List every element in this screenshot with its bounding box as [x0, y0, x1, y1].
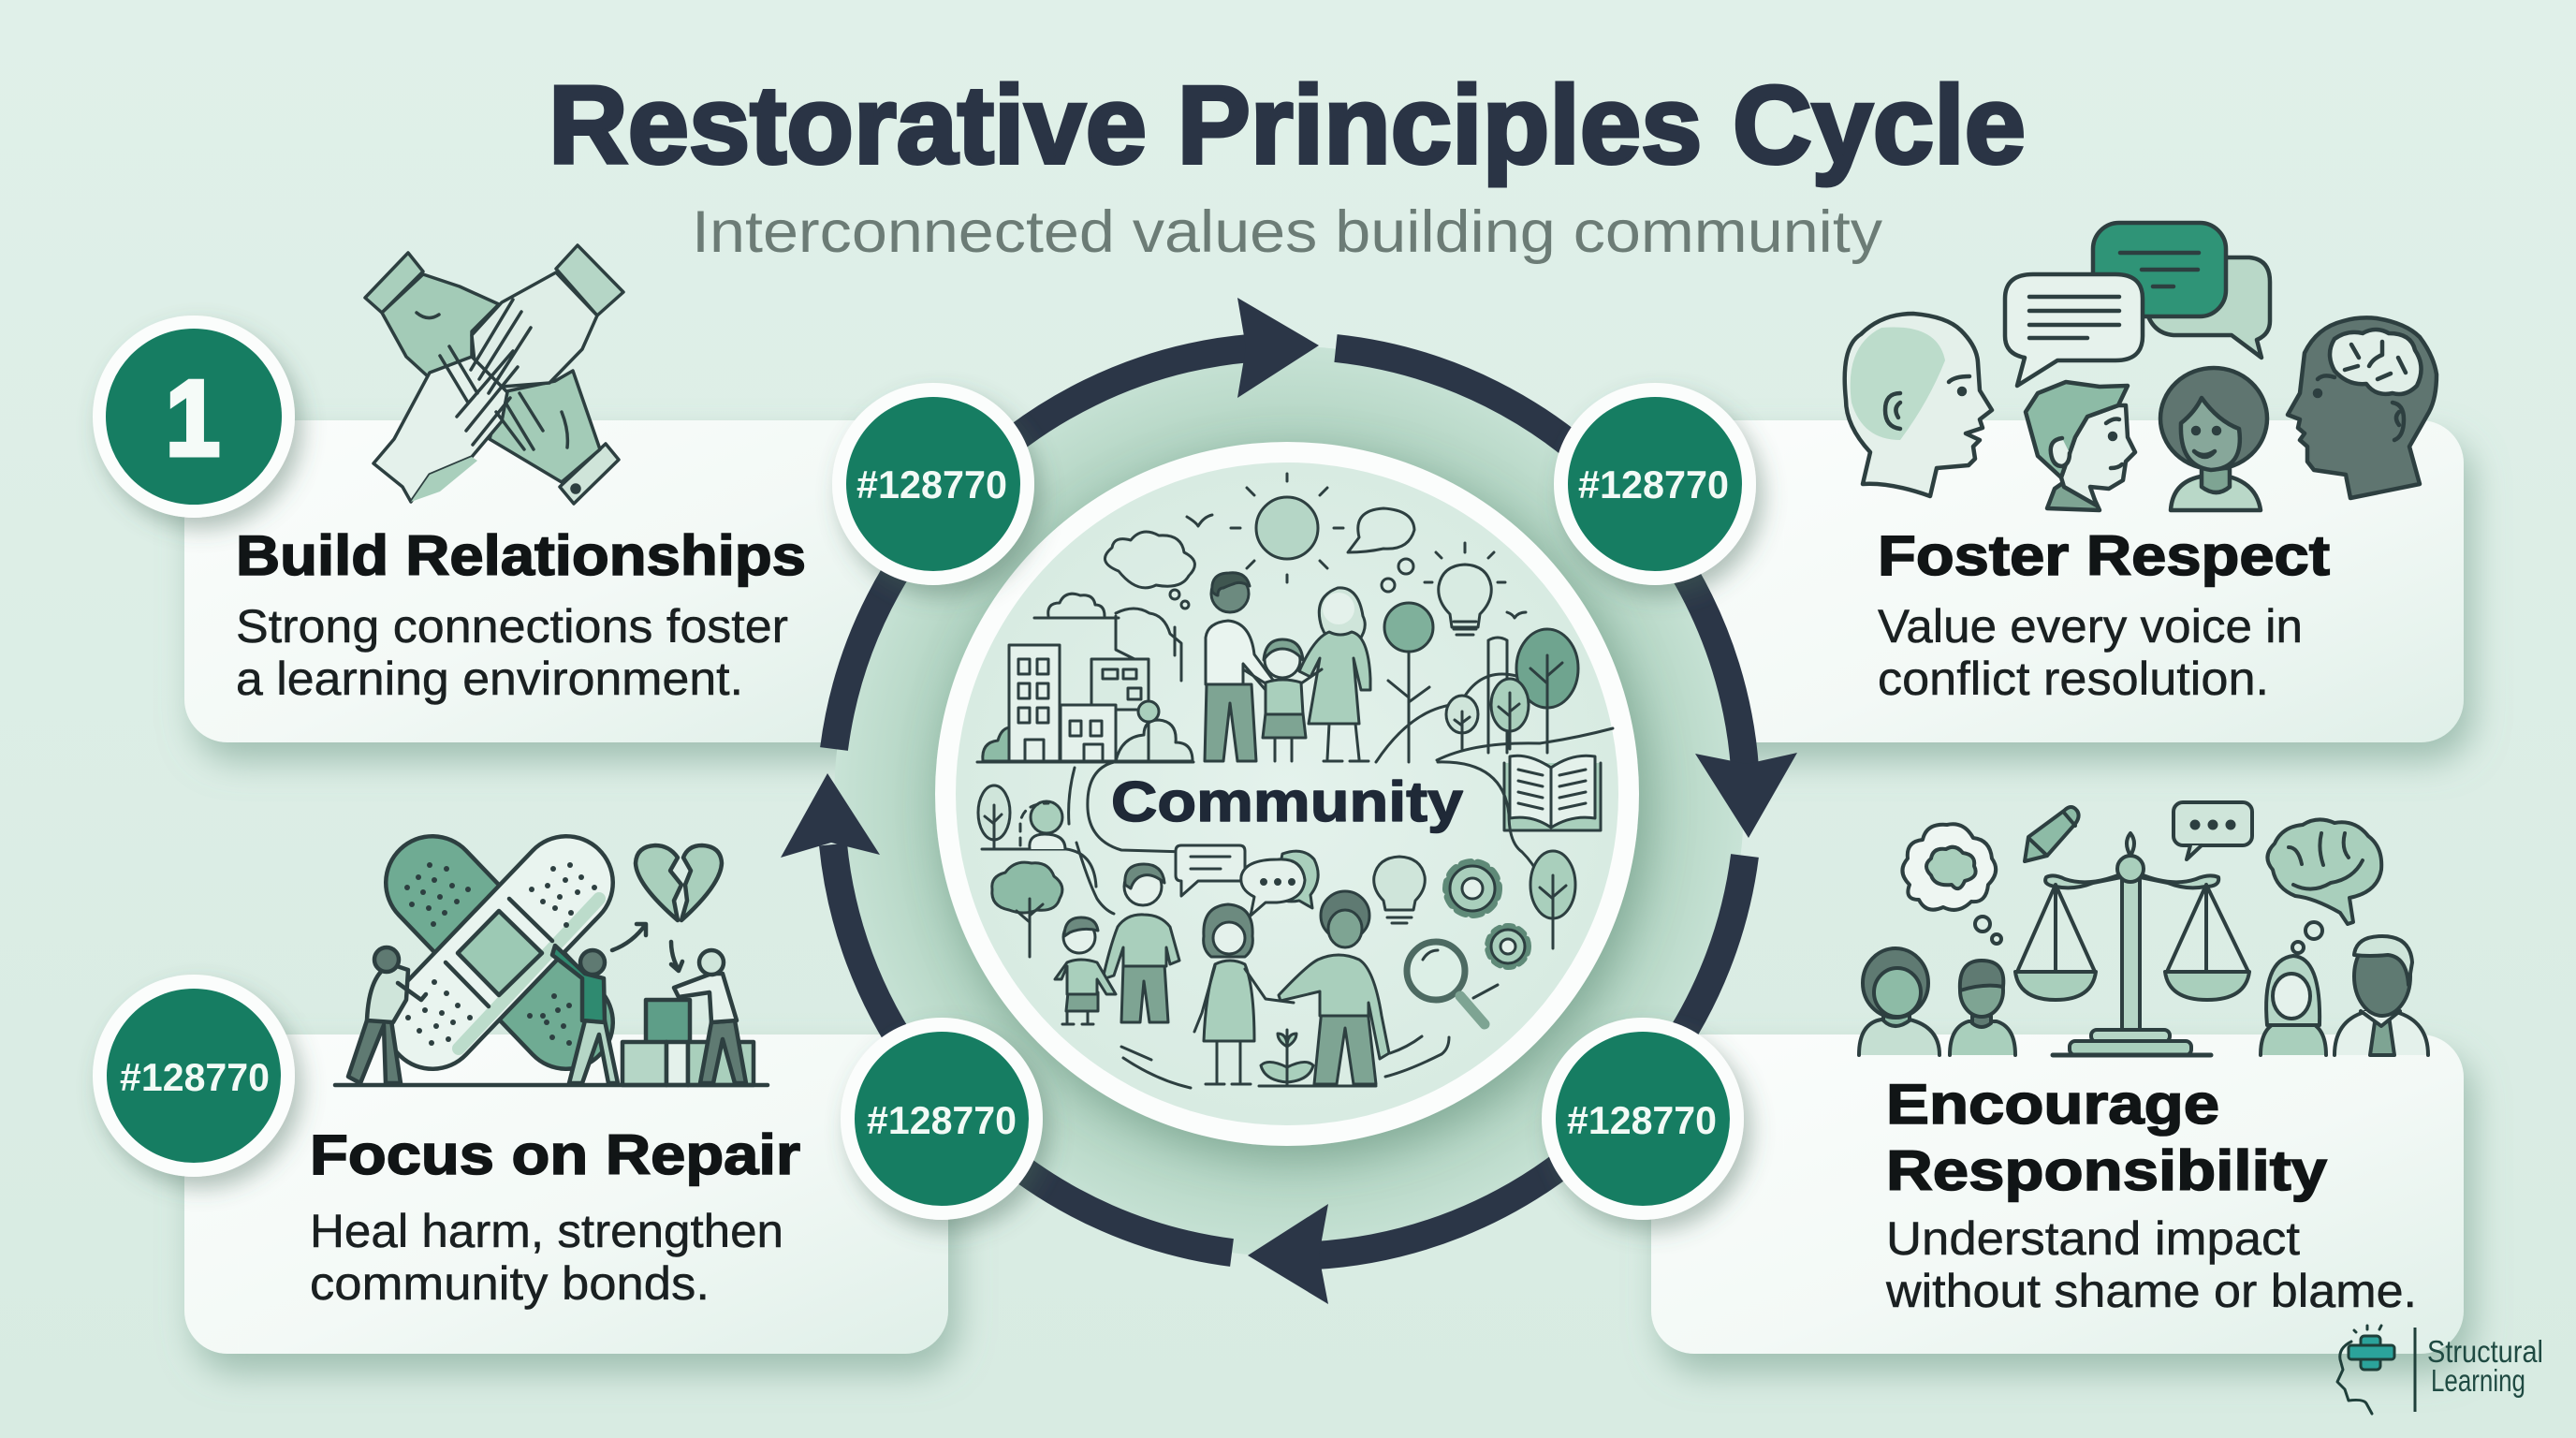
text: focus on repair description line two: community bonds. [310, 1257, 710, 1310]
blocks [622, 1000, 754, 1085]
badge: top left [832, 383, 1034, 585]
badge: focus on repair [93, 975, 295, 1177]
text: foster respect description line two: conflict resolution. [1878, 653, 2269, 705]
figure: family child [1243, 639, 1322, 761]
icon: birds [1187, 515, 1526, 618]
thought cloud [1902, 824, 2001, 944]
icon: cloud [1105, 532, 1194, 588]
text: encourage responsibility description line two: without shame or blame. [1885, 1265, 2417, 1317]
bandage strip green [432, 883, 566, 1022]
logo icon [2337, 1326, 2394, 1414]
figure: girl [1194, 904, 1294, 1084]
badge: bottom ring left [841, 1018, 1043, 1220]
central community circle [935, 442, 1639, 1146]
icon: crossed bandage repair scene [335, 845, 768, 1085]
icon: four joined hands [365, 245, 623, 504]
icon: small gear [1488, 927, 1528, 966]
person two [1950, 961, 2015, 1055]
panel: foster respect card [1685, 420, 2464, 742]
text: foster respect description: Value every voice in [1878, 600, 2303, 653]
figure: man with curly hair [1279, 891, 1389, 1084]
person left [348, 947, 426, 1083]
arrows [612, 924, 682, 971]
subtitle: Interconnected values building community [692, 199, 1883, 265]
badge: bottom ring right: #128770 [1567, 1098, 1717, 1142]
icon: open book [1504, 756, 1601, 830]
badge: step one [93, 315, 295, 518]
icon: lower bulb [1374, 857, 1425, 923]
badge: bottom ring left: #128770 [867, 1098, 1017, 1142]
badge: bottom ring right [1542, 1018, 1744, 1220]
logo text: Structural [2427, 1334, 2543, 1369]
person one [1859, 948, 1939, 1055]
scales of justice [2015, 833, 2249, 1055]
community label: Community [1111, 770, 1464, 833]
figure: family man [1205, 573, 1275, 761]
buildings [977, 609, 1193, 762]
text: build relationships description line two: a learning environment. [236, 653, 743, 705]
icon: left tree [992, 862, 1062, 957]
person three [2261, 956, 2326, 1055]
head: girl [2160, 368, 2267, 510]
text: focus on repair description: Heal harm, strengthen [310, 1205, 783, 1257]
badge: top right [1554, 383, 1756, 585]
icon: speech bubble [1348, 508, 1414, 552]
number 1: 1 [166, 360, 220, 478]
icon: small cloud [1034, 594, 1119, 618]
logo text: Learning [2431, 1363, 2525, 1398]
speech bubble white [2005, 274, 2143, 386]
logo text [2427, 1334, 2543, 1398]
heading: build relationships: Build Relationships [236, 524, 806, 587]
icon: sprout [1259, 1030, 1376, 1086]
cycle arrows [781, 298, 1797, 1304]
icon: chat bubbles [1176, 845, 1318, 916]
bandage strip white [432, 883, 599, 1049]
icon: lightbulb [1425, 543, 1505, 635]
figure: family woman [1299, 588, 1370, 761]
icon: tree with plant [1384, 603, 1433, 762]
person four [2334, 936, 2428, 1055]
badge: top left: #128770 [856, 462, 1007, 506]
text: encourage responsibility description: Understand impact [1886, 1212, 2300, 1265]
brain [2267, 819, 2381, 953]
icon: talking heads and speech bubbles [1845, 223, 2437, 510]
panel: encourage responsibility card [1651, 1034, 2464, 1354]
logo divider [2413, 1328, 2417, 1412]
icon: hills and trees [1376, 629, 1613, 762]
speech bubble teal [2093, 223, 2226, 316]
logo: structural learning [2337, 1326, 2543, 1414]
icon: scales and people [1859, 802, 2428, 1055]
icon: magnifier [1407, 942, 1485, 1024]
bandage pad [446, 899, 552, 1006]
figures: adult and small boy [1055, 864, 1179, 1024]
person right [674, 950, 746, 1083]
panel: build relationships card [184, 420, 896, 742]
speech bubble light [2145, 257, 2270, 358]
icon: thought dots [1170, 559, 1413, 609]
heading: focus on repair: Focus on Repair [310, 1123, 800, 1186]
icon: sun [1231, 474, 1343, 582]
ground line [335, 1083, 768, 1087]
badge: focus on repair: #128770 [120, 1055, 270, 1099]
person middle [552, 946, 618, 1083]
panel: focus on repair card [184, 1034, 948, 1354]
icon: small tree and child [978, 785, 1096, 887]
broken heart [636, 845, 722, 920]
title: Restorative Principles Cycle [549, 64, 2026, 187]
pencil [2025, 807, 2079, 861]
text: build relationships description: Strong connections foster [236, 600, 788, 653]
cycle ring disc [834, 346, 1744, 1256]
icon: right tree [1530, 851, 1575, 948]
heading: responsibility: Responsibility [1886, 1139, 2328, 1202]
bandage dots [404, 862, 597, 1046]
head: brain profile [2288, 317, 2437, 498]
winding paths [1069, 762, 1544, 914]
heading: encourage: Encourage [1886, 1073, 2219, 1136]
icon: large gear [1447, 863, 1498, 914]
head: left profile [1845, 314, 1992, 496]
speech bubble [2174, 802, 2252, 859]
head: boy [2026, 382, 2135, 510]
badge: top right: #128770 [1578, 462, 1729, 506]
heading: foster respect: Foster Respect [1878, 524, 2330, 587]
motion lines [1121, 985, 1498, 1088]
